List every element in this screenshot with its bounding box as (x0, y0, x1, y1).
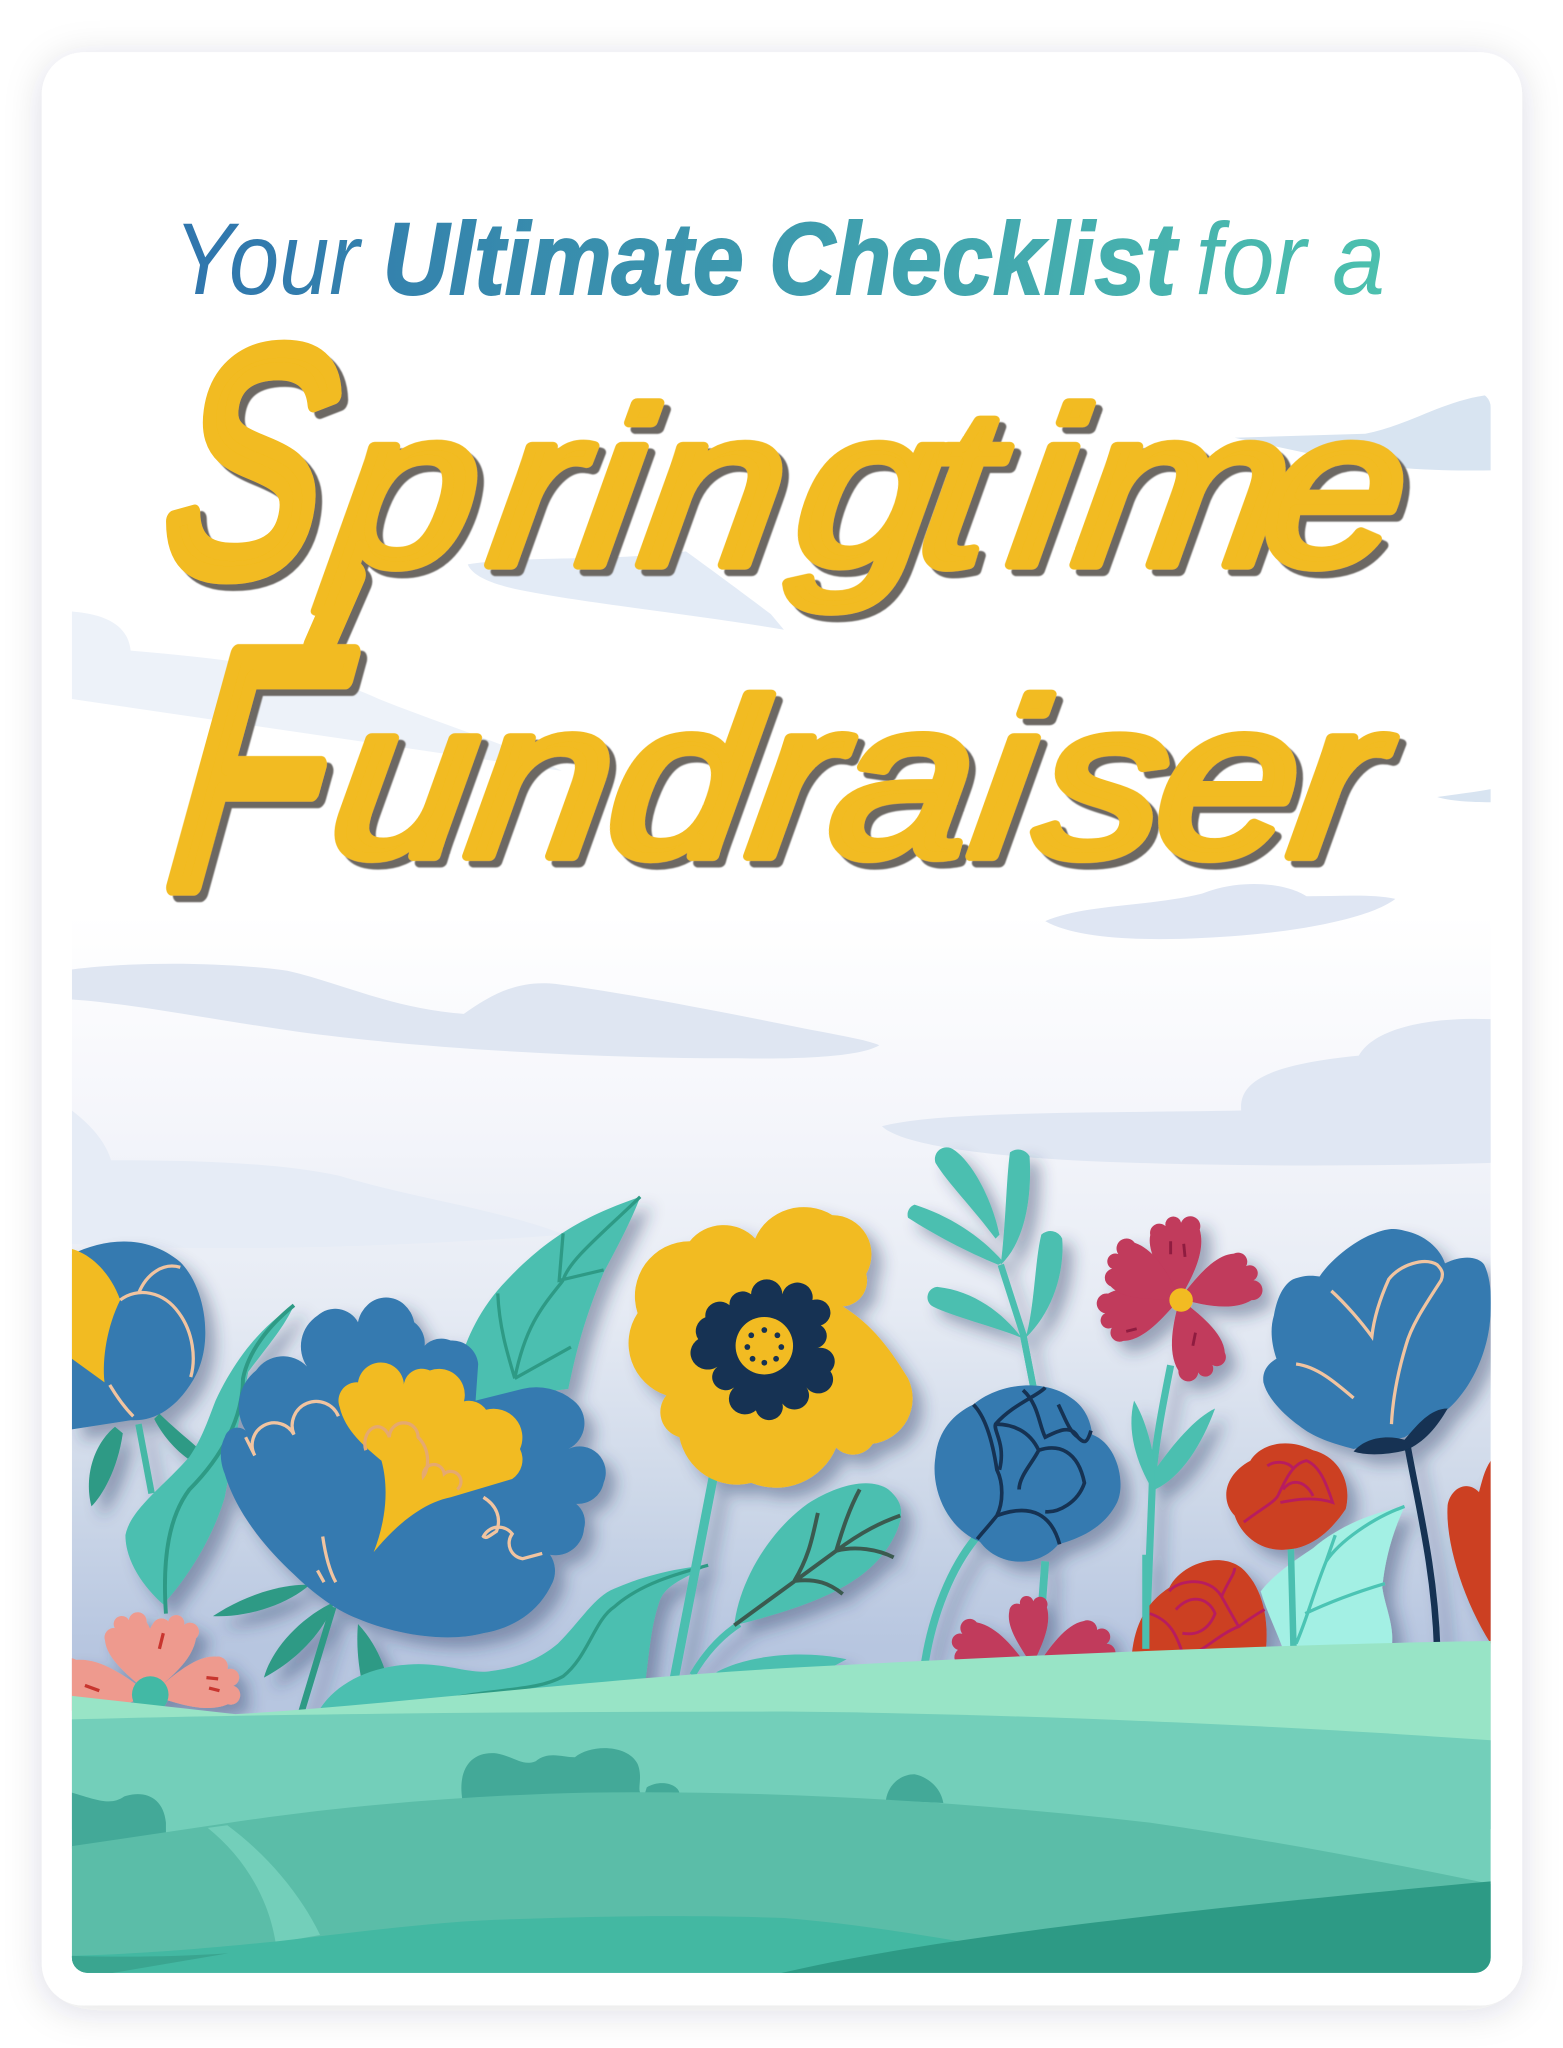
flower: crimson with stem (1094, 1215, 1266, 1649)
flower: big blue peony (213, 1298, 606, 1719)
leaf: pale (1261, 1506, 1405, 1653)
main title (149, 284, 1423, 958)
flower: right red tulip (1447, 1461, 1491, 1644)
title line: Springtime: S (149, 284, 353, 641)
title line: Fundraiser: F (156, 582, 367, 958)
bushes (72, 1748, 943, 1849)
flower: small red rose (1226, 1443, 1347, 1550)
flowers and leaves (52, 1147, 1491, 1725)
flower: salmon (72, 1612, 258, 1714)
title line: Springtime: pringtime (316, 365, 1423, 612)
flower: blue rosebud (935, 1385, 1121, 1562)
flower: blue tulip (1263, 1229, 1491, 1649)
leaf: left of big flower (125, 1305, 294, 1614)
clouds (72, 396, 1491, 1202)
title kicker: Ultimate Checklist (383, 202, 1180, 316)
illustration panel (72, 396, 1491, 1973)
flower: top-left peony (72, 1242, 205, 1506)
leaf: veined (692, 1483, 901, 1675)
leaf: bottom wave (317, 1565, 708, 1725)
stem: lower rosebud (1041, 1561, 1045, 1614)
title line: Springtime (149, 284, 1423, 647)
path (208, 1825, 320, 1943)
stem: blue rosebud (925, 1538, 976, 1662)
stem: yellow flower (674, 1476, 713, 1679)
title kicker: for a (1195, 202, 1385, 316)
flower: crimson lower (952, 1596, 1130, 1660)
flower: large red rose (1131, 1555, 1267, 1659)
title line: Fundraiser (156, 582, 1406, 958)
leaf: upper right of big flower (460, 1197, 640, 1401)
title kicker: Your (174, 202, 363, 316)
leaf: small ground leaf (716, 1654, 854, 1672)
stem: fern to rosebud (1023, 1334, 1033, 1388)
sky (72, 1072, 1491, 1829)
title line: Fundraiser: undraiser (320, 656, 1406, 904)
ground hills (72, 1641, 1491, 1975)
plant: fern (908, 1147, 1063, 1388)
flower: yellow poppy (629, 1207, 913, 1488)
